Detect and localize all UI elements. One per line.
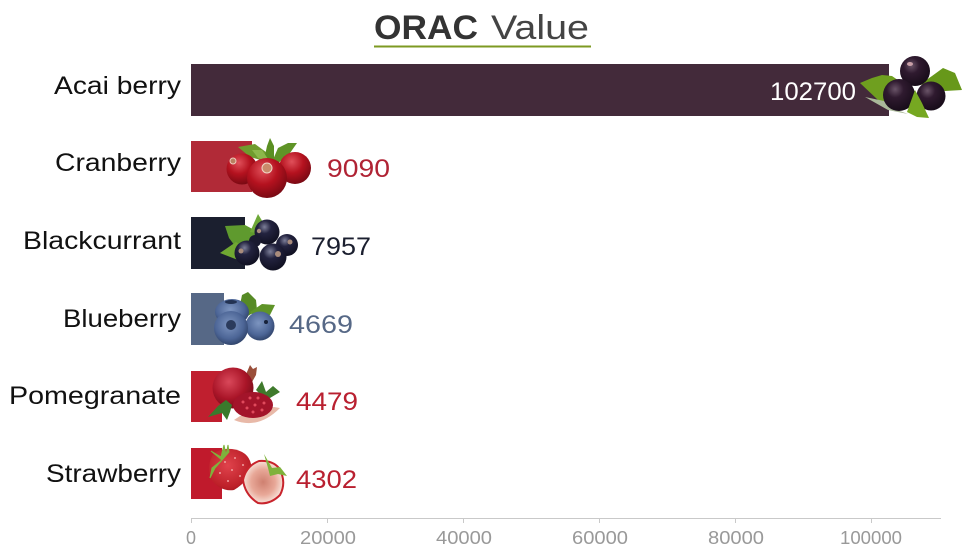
row: Strawberry — [46, 445, 357, 503]
row: Cranberry — [55, 138, 390, 198]
icon: strawberries — [209, 445, 287, 503]
x axis: 0 — [186, 528, 196, 548]
icon: pomegranate — [208, 365, 280, 423]
title: Value — [491, 9, 589, 47]
x axis: 80000 — [708, 528, 764, 548]
row: Cranberry: Cranberry — [55, 149, 182, 177]
x axis — [186, 518, 941, 548]
icon: blackcurrants — [220, 214, 298, 270]
row: Pomegranate — [9, 365, 358, 423]
x axis: 20000 — [300, 528, 356, 548]
x axis: 60000 — [572, 528, 628, 548]
row: Blackcurrant — [23, 214, 371, 270]
row: Blackcurrant: Blackcurrant — [23, 227, 181, 255]
x axis: 100000 — [840, 528, 902, 548]
row: Cranberry: 9090 — [327, 155, 390, 183]
row: Acai berry: Acai berry — [54, 72, 182, 100]
row: Strawberry: Strawberry — [46, 460, 182, 488]
row: Strawberry: 4302 — [296, 466, 357, 494]
title — [374, 9, 591, 48]
row: Acai berry: 102700 — [770, 78, 856, 106]
icon: acai berries — [860, 56, 962, 118]
row: Blueberry: 4669 — [289, 311, 353, 339]
row: Pomegranate: Pomegranate — [9, 382, 181, 410]
icon: blueberries — [214, 292, 275, 345]
icon: cranberries — [226, 138, 311, 198]
row: Blueberry — [63, 292, 353, 345]
title: ORAC — [374, 9, 478, 47]
row: Pomegranate: 4479 — [296, 388, 358, 416]
row: Blackcurrant: 7957 — [311, 233, 371, 261]
row: Acai berry — [54, 56, 962, 118]
row: Blueberry: Blueberry — [63, 305, 182, 333]
x axis: 40000 — [436, 528, 492, 548]
